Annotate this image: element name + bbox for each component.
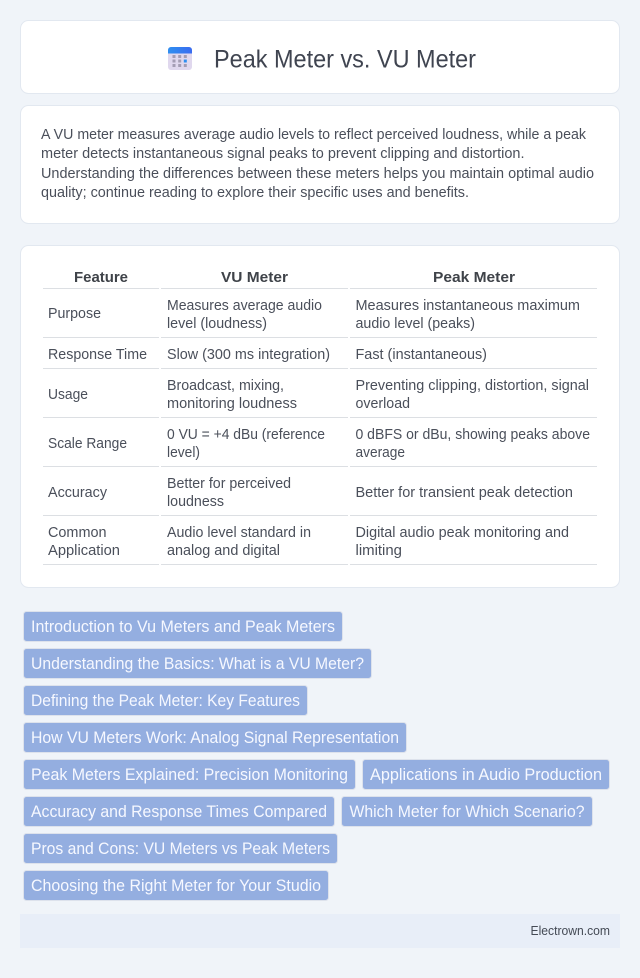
row: scale range: level) bbox=[167, 445, 200, 461]
table header row: Feature bbox=[74, 269, 128, 286]
row: common application bbox=[43, 525, 597, 565]
panel: introduction bbox=[20, 106, 620, 224]
intro paragraph bbox=[41, 126, 594, 201]
row: accuracy: Better for transient peak detection bbox=[356, 485, 573, 501]
row: common application: Digital audio peak monitoring and bbox=[356, 525, 569, 541]
panel: topic tags bbox=[24, 612, 610, 900]
row: purpose: level (loudness) bbox=[167, 316, 267, 332]
row: usage: Preventing clipping, distortion, signal bbox=[356, 378, 589, 394]
table header row: Peak Meter bbox=[433, 269, 515, 286]
row: response time bbox=[43, 347, 597, 369]
intro paragraph: A VU meter measures average audio levels to reflect perceived loudness, while a peak bbox=[41, 126, 586, 143]
tag: accuracy: Accuracy and Response Times Compared bbox=[31, 802, 327, 821]
tag: accuracy bbox=[24, 796, 334, 826]
panel: comparison table bbox=[20, 246, 620, 588]
icon: calendar bbox=[168, 47, 192, 70]
tag: choosing: Choosing the Right Meter for Your Studio bbox=[31, 876, 321, 895]
row: common application: Common bbox=[48, 525, 106, 541]
tag: basics: Understanding the Basics: What is a VU Meter? bbox=[31, 654, 364, 673]
row: purpose: Measures average audio bbox=[167, 298, 322, 314]
row: common application: Audio level standard in bbox=[167, 525, 311, 541]
intro paragraph: quality; continue reading to explore their specific uses and benefits. bbox=[41, 184, 469, 201]
tag: pros and cons bbox=[24, 834, 338, 864]
row: scale range: average bbox=[356, 445, 405, 461]
row: purpose: Measures instantaneous maximum bbox=[356, 298, 580, 314]
row: scale range bbox=[43, 427, 597, 467]
tag: how vu meters work bbox=[24, 722, 406, 752]
intro paragraph: meter detects instantaneous signal peaks to prevent clipping and distortion. bbox=[41, 145, 524, 162]
tag: how vu meters work: How VU Meters Work: Analog Signal Representation bbox=[31, 728, 399, 747]
tag: applications: Applications in Audio Production bbox=[370, 765, 602, 784]
tag: peak meters explained: Peak Meters Explained: Precision Monitoring bbox=[31, 765, 348, 784]
tag: introduction: Introduction to Vu Meters and Peak Meters bbox=[31, 617, 335, 636]
tag: peak meters explained bbox=[24, 760, 356, 790]
title: Peak Meter vs. VU Meter bbox=[214, 46, 476, 74]
row: purpose: audio level (peaks) bbox=[356, 316, 475, 332]
row: scale range: Scale Range bbox=[48, 436, 127, 452]
tag: which meter bbox=[342, 796, 592, 826]
row: purpose bbox=[43, 298, 597, 338]
row: scale range: 0 VU = +4 dBu (reference bbox=[167, 427, 325, 443]
row: accuracy: Better for perceived bbox=[167, 476, 291, 492]
row: common application: Application bbox=[48, 543, 120, 559]
intro paragraph: Understanding the differences between these meters helps you maintain optimal audio bbox=[41, 165, 594, 182]
tag: basics bbox=[24, 648, 372, 678]
tag: introduction bbox=[24, 612, 342, 642]
tag: applications bbox=[362, 760, 610, 790]
row: usage: Broadcast, mixing, bbox=[167, 378, 284, 394]
row: common application: analog and digital bbox=[167, 543, 280, 559]
row: accuracy bbox=[43, 476, 597, 516]
row: scale range: 0 dBFS or dBu, showing peaks above bbox=[356, 427, 590, 443]
table header row: VU Meter bbox=[221, 269, 288, 286]
tag: pros and cons: Pros and Cons: VU Meters vs Peak Meters bbox=[31, 839, 330, 858]
row: response time: Response Time bbox=[48, 347, 147, 363]
tag: defining: Defining the Peak Meter: Key Features bbox=[31, 691, 300, 710]
row: purpose: Purpose bbox=[48, 306, 101, 322]
tag: defining bbox=[24, 686, 308, 716]
row: accuracy: Accuracy bbox=[48, 485, 108, 501]
footer credit: Electrown.com bbox=[530, 923, 610, 938]
panel: header bbox=[20, 20, 620, 94]
tag: which meter: Which Meter for Which Scenario? bbox=[350, 802, 584, 821]
row: usage: monitoring loudness bbox=[167, 396, 297, 412]
footer bbox=[20, 914, 620, 948]
row: response time: Slow (300 ms integration) bbox=[167, 347, 330, 363]
tag: choosing bbox=[24, 870, 328, 900]
row: accuracy: loudness bbox=[167, 494, 224, 510]
row: usage: Usage bbox=[48, 387, 88, 403]
table header row bbox=[43, 269, 597, 289]
row: usage bbox=[43, 378, 597, 418]
row: usage: overload bbox=[356, 396, 410, 412]
row: common application: limiting bbox=[356, 543, 402, 559]
row: response time: Fast (instantaneous) bbox=[356, 347, 487, 363]
